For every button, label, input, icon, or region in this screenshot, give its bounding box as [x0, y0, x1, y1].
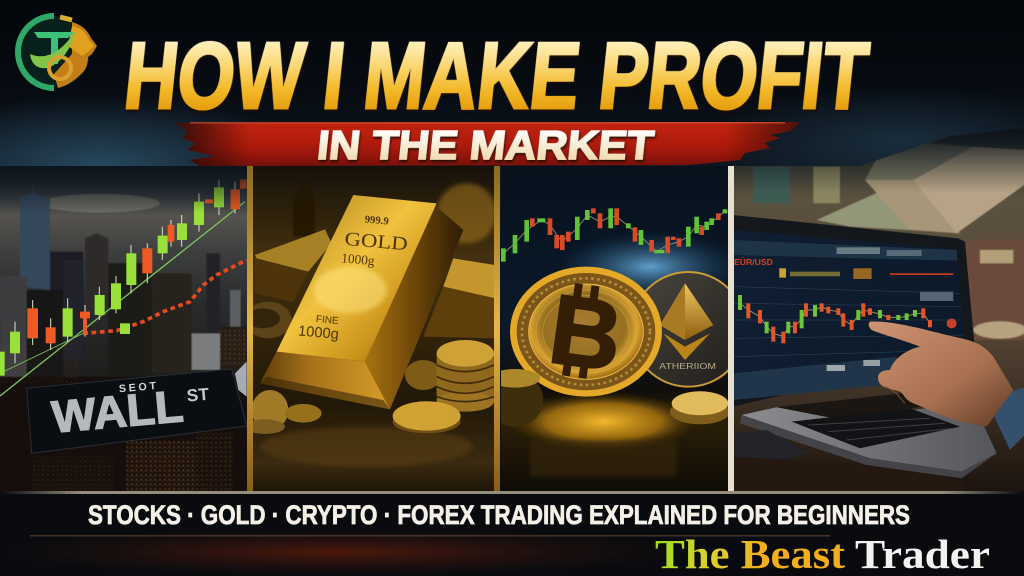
bottom banner — [0, 491, 1024, 576]
forex chart — [738, 295, 932, 343]
panel: crypto — [501, 208, 728, 491]
laptop: EUR/USD — [734, 257, 773, 267]
panel: stocks — [0, 160, 250, 497]
brand name: The Beast — [655, 531, 845, 576]
ethereum coin — [644, 271, 728, 388]
gold bar: 1000g — [297, 323, 339, 343]
gold bar: GOLD — [344, 229, 409, 255]
money notes — [753, 140, 1024, 340]
panel dividers — [247, 166, 734, 491]
bitcoin coin: B — [543, 273, 629, 392]
crypto foreground coins — [487, 369, 730, 427]
pointing hand — [869, 321, 1024, 450]
wall street sign: SEOT — [119, 380, 159, 395]
wall street sign: ST — [186, 384, 210, 406]
subtitle ribbon — [175, 122, 800, 168]
crypto candlestick chart — [501, 208, 727, 262]
panel: gold — [245, 163, 500, 497]
gold bar: FINE — [315, 314, 339, 327]
gold bar: 1000g — [341, 250, 376, 268]
brand name: Trader — [855, 531, 990, 576]
subtitle ribbon: IN THE MARKET — [315, 122, 656, 168]
laptop — [733, 215, 997, 497]
candlesticks — [0, 179, 247, 376]
wall street sign: WALL — [50, 380, 185, 443]
panel: forex — [733, 127, 1024, 497]
wall street sign — [27, 362, 247, 453]
gold coins — [245, 340, 494, 434]
bitcoin coin — [510, 267, 662, 397]
city skyline — [0, 183, 248, 497]
gold bar: 999.9 — [364, 215, 389, 228]
brand name — [655, 531, 990, 576]
ethereum coin: ATHERIIOM — [659, 361, 716, 371]
logo — [18, 16, 97, 88]
gold bar — [260, 195, 463, 409]
background gold bars — [245, 229, 495, 338]
